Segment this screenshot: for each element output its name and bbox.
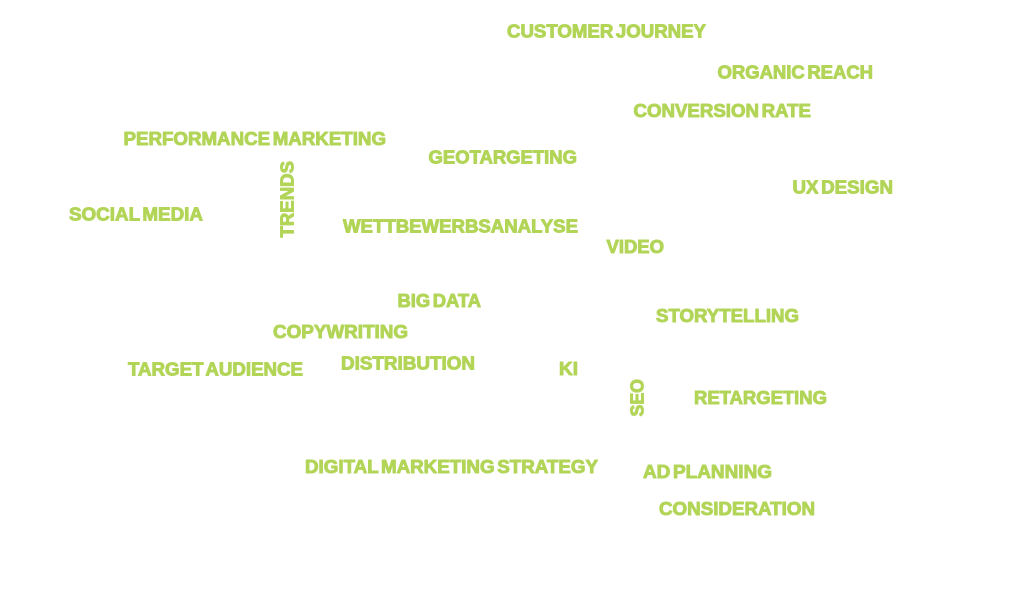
term: social media: SOCIAL MEDIA [69, 204, 203, 224]
term: copywriting: COPYWRITING [273, 322, 408, 342]
term: organic reach: ORGANIC REACH [718, 62, 873, 82]
term: target audience: TARGET AUDIENCE [128, 360, 303, 380]
term: wettbewerbsanalyse: WETTBEWERBSANALYSE [343, 216, 578, 236]
term: ad planning: AD PLANNING [643, 462, 772, 482]
term: retargeting: RETARGETING [694, 388, 827, 408]
term: video: VIDEO [606, 237, 664, 257]
term: digital marketing strategy: DIGITAL MARKETING STRATEGY [305, 457, 598, 477]
term: customer journey: CUSTOMER JOURNEY [507, 22, 706, 42]
term: storytelling: STORYTELLING [656, 306, 799, 326]
term: conversion rate: CONVERSION RATE [634, 101, 811, 121]
term: ki: KI [559, 359, 578, 379]
term: geotargeting: GEOTARGETING [428, 148, 577, 168]
term: performance marketing: PERFORMANCE MARKETING [124, 129, 386, 149]
term: ux design: UX DESIGN [792, 178, 893, 198]
term: seo (vertical): SEO [628, 379, 648, 416]
term: distribution: DISTRIBUTION [341, 354, 475, 374]
term: big data: BIG DATA [398, 291, 481, 311]
term: consideration: CONSIDERATION [659, 499, 815, 519]
term: trends (vertical): TRENDS [278, 161, 298, 238]
